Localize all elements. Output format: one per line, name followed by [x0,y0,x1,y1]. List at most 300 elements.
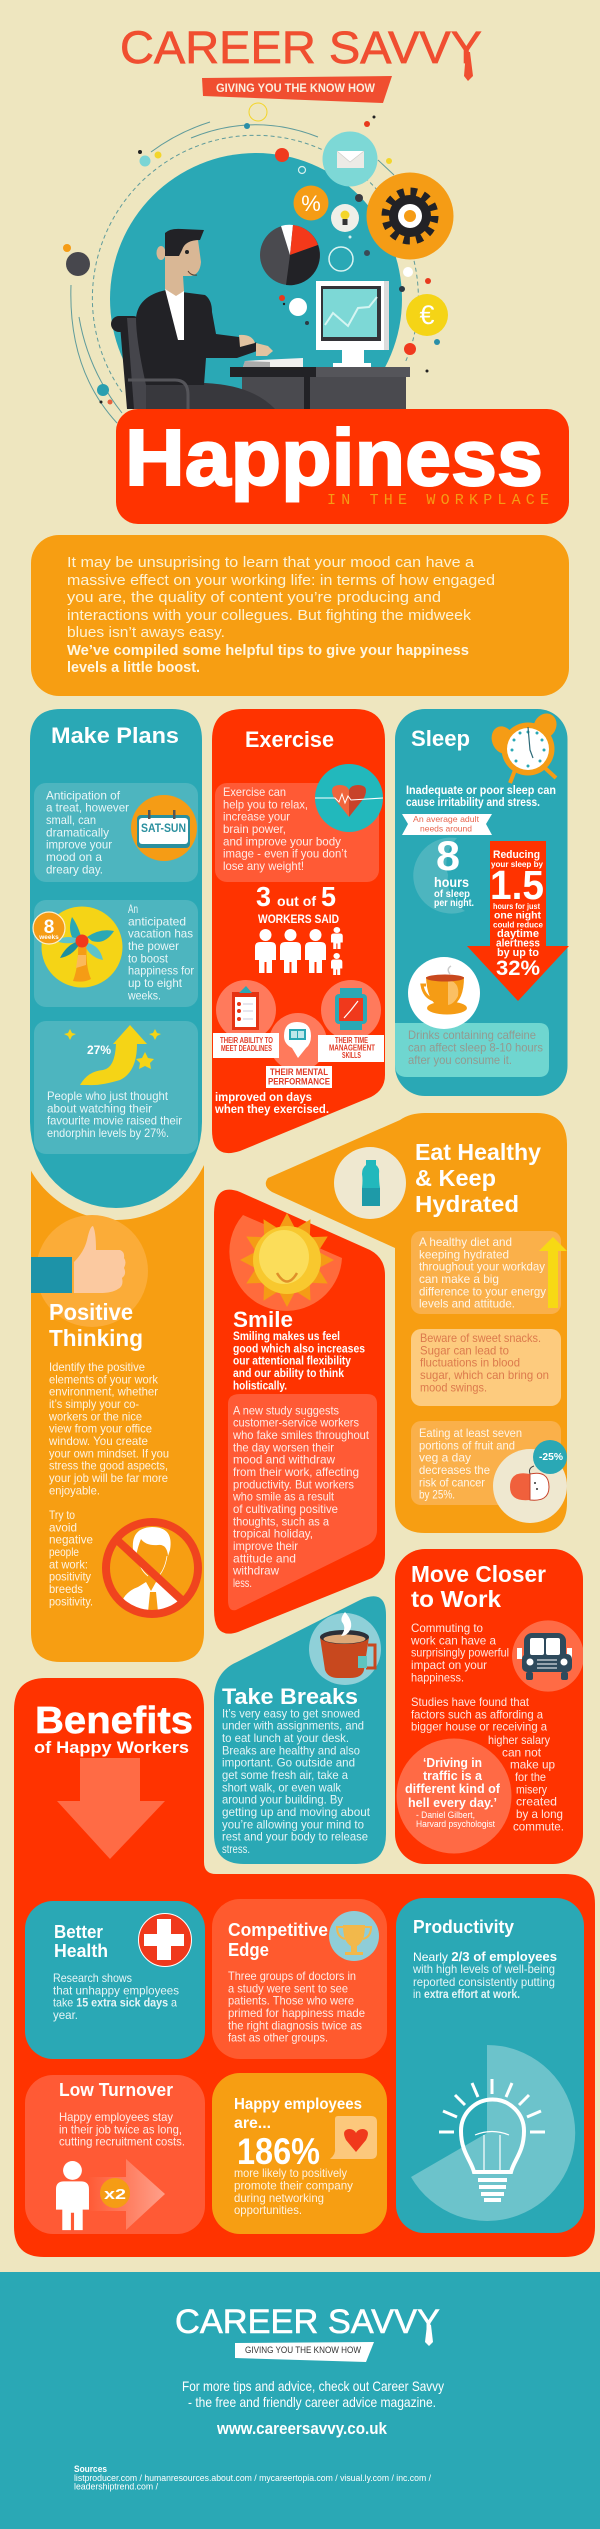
card: productivity: Productivity [413,1917,514,1937]
panel: positive thinking: people [49,1545,79,1559]
footer band [0,2272,600,2529]
text block: anticipation: a treat, however [46,801,129,815]
text block: vacation: An [128,902,138,916]
intro panel [31,535,569,696]
icon: envelope bubble [322,132,378,186]
sources [74,2464,431,2492]
panel: positive thinking: your job will be far more [49,1471,168,1485]
footer tagline ribbon [235,2342,374,2362]
icon: head with book [284,1022,311,1058]
arrow: reducing sleep statistic: one night [494,910,541,922]
icon: gear [366,172,454,260]
text block: anticipation: improve your [46,838,112,852]
text block: customer service study: the day worsen their [233,1440,334,1454]
callout: quote: traffic is a [423,1769,483,1783]
text block: healthy diet: can make a big [419,1272,499,1286]
text block: vacation: happiness for [128,964,194,978]
footer tagline ribbon: GIVING YOU THE KNOW HOW [245,2345,361,2355]
text block: anticipation: dreary day. [46,862,103,876]
card: competitive edge: Competitive [228,1920,328,1940]
text block: healthy diet [411,1231,567,1314]
card: competitive edge: Edge [228,1940,269,1960]
panel: positive thinking: breeds [49,1582,83,1596]
text block: customer service study: attitude and [233,1551,296,1565]
callout: quote: hell every day.’ [408,1796,497,1810]
card: better health: Research shows [53,1971,132,1985]
chart: two thirds pie [411,2045,575,2221]
text block: anticipation: mood on a [46,850,102,864]
tagline ribbon: GIVING YOU THE KNOW HOW [216,83,375,95]
footer logo: CAREER SAVVY [175,2303,440,2341]
text block: smile summary: and our ability to think [233,1366,344,1380]
panel: move closer to work: bigger house or receiving a [411,1720,547,1734]
callout: quote: Harvard psychologist [416,1819,495,1829]
text block: customer service study: mood and withdraw [233,1453,335,1467]
label: time management [318,1035,384,1062]
panel: positive thinking: workers or the nice [48,1409,142,1423]
text block: exercise benefits: help you to relax, [223,797,308,811]
ribbon: average adult: needs around [420,824,472,834]
caffeine note: after you consume it. [408,1053,512,1067]
panel: smile: Smile [233,1307,293,1332]
text block: fruit and veg [411,1421,561,1505]
panel: take breaks: you’re allowing your mind to [222,1817,364,1831]
panel: take breaks: It’s very easy to get snowed [222,1706,360,1720]
card: competitive edge: primed for happiness made [228,2006,365,2020]
card: competitive edge: Three groups of doctors in [228,1969,356,1983]
panel: take breaks: under with assignments, and [222,1719,364,1733]
label: deadlines: MEET DEADLINES [221,1044,272,1053]
card: happy employees 186 percent: opportunities. [234,2203,302,2217]
panel: move closer to work: can not [502,1745,542,1759]
panel: benefits of happy workers background: Benefits [35,1700,193,1742]
text block: movie endorphins: 27% [87,1043,111,1057]
panel: move closer to work: misery [516,1782,547,1796]
panel: move closer to work: impact on your [411,1658,487,1672]
card: low turnover: Low Turnover [59,2080,173,2100]
label: mental performance [266,1066,332,1088]
text block: healthy diet: throughout your workday [419,1260,545,1274]
text block: smile summary [233,1329,365,1392]
caffeine note [395,1023,549,1077]
card: productivity: Nearly 2/3 of employees [413,1949,557,1964]
icon: euro coin: € [419,300,435,330]
sources: leadershiptrend.com / [74,2482,158,2492]
text block: movie endorphins: favourite movie raised their [47,1114,182,1128]
statistic: 8 hours of sleep: 8 [436,832,460,879]
text block: fruit and veg: portions of fruit and [419,1438,515,1452]
icon: smiling sun [229,1213,342,1311]
panel: move closer to work: by a long [516,1807,563,1821]
panel: move closer to work: to Work [411,1586,502,1612]
icon: weekend calendar [131,795,197,861]
label: deadlines: THEIR ABILITY TO [220,1036,273,1045]
man in suit on chair [111,229,275,409]
card: better health: that unhappy employees [53,1983,179,1997]
icon: light bulb bubble [331,204,359,232]
panel: move closer to work: higher salary [488,1733,550,1747]
panel: positive thinking: elements of your work [49,1372,158,1386]
text block: healthy diet: A healthy diet and [419,1235,512,1249]
sources: listproducer.com / humanresources.about.com / mycareertopia.com / visual.ly.com / inc.com / [74,2473,431,2483]
footer call to action: www.careersavvy.co.uk [216,2419,387,2438]
panel: exercise: Exercise [245,727,334,752]
text block: exercise benefits: and improve your body [223,834,341,848]
text block: fruit and veg: by 25%. [419,1488,455,1502]
panel: take breaks: getting up and moving about [222,1805,371,1819]
panel: positive thinking: positivity. [49,1594,93,1608]
panel: sleep: Sleep [411,726,470,751]
arrow: reducing sleep statistic: daytime [497,928,539,940]
callout: quote: different kind of [405,1782,501,1796]
panel: positive thinking: stress the good aspects, [49,1459,168,1473]
text block: exercise benefits: increase your [223,810,290,824]
panel: smile [214,1190,385,1634]
icon: heart speech bubble [330,2116,377,2159]
panel: positive thinking [18,1024,214,1662]
card: happy employees 186 percent [212,2073,387,2234]
text block: anticipation: small, can [46,813,96,827]
panel: move closer to work: Commuting to [411,1621,483,1635]
arrow: reducing sleep statistic: Reducing [493,849,540,861]
icon: percent bubble [294,186,328,220]
card: happy employees 186 percent: 186% [237,2131,320,2172]
panel: move closer to work: factors such as affording a [411,1707,543,1721]
card: productivity [396,1898,584,2233]
card: happy employees 186 percent: during networking [234,2191,324,2205]
icon: euro coin [406,294,448,336]
panel: move closer to work: Studies have found that [411,1695,530,1709]
label: time management: SKILLS [342,1051,361,1060]
statistic: 3 out of 5: 3 [256,881,271,912]
icon: rising arrow with stars [64,1025,161,1085]
panel: benefits of happy workers background: of Happy Workers [34,1738,189,1757]
text block: sweet snacks [411,1329,561,1406]
card: happy employees 186 percent: promote their company [234,2179,353,2193]
text block: smile summary: holistically. [233,1378,287,1392]
panel: benefits of happy workers background [14,1678,595,2257]
title banner: Happiness in the workplace [116,409,569,524]
panel: eat healthy and keep hydrated: Eat Healthy [415,1139,541,1165]
intro panel: massive effect on your working life: in terms of how engaged [67,573,495,589]
sources: Sources [74,2464,107,2474]
panel: move closer to work: work can have a [410,1633,496,1647]
intro panel: interactions with your collegues. But fighting the midweek [67,608,472,624]
footer call to action: For more tips and advice, check out Career Savvy [182,2378,444,2394]
icon: palm tree: weeks [38,934,59,941]
callout: quote [396,1738,512,1854]
text block: healthy diet: difference to your energy [419,1284,546,1298]
text block: fruit and veg: veg a day [419,1451,471,1465]
statistic: 3 out of 5: out of [277,893,316,909]
panel: positive thinking: at work: [49,1557,88,1571]
panel: positive thinking: Positive [49,1299,133,1325]
text block: anticipation [34,783,198,882]
card: productivity: reported consistently putting [413,1975,555,1989]
text block: movie endorphins: People who just thought [47,1089,169,1103]
text block: customer service study: thoughts, such as a [233,1514,329,1528]
panel: take breaks: Breaks are healthy and also [222,1743,360,1757]
icon: palm tree [33,906,122,988]
intro panel: blues isn’t aways easy. [67,625,225,641]
panel: positive thinking: view from your office [49,1422,152,1436]
text block: vacation: up to eight [128,976,183,990]
panel: exercise: when they exercised. [214,1102,329,1116]
intro panel: levels a little boost. [67,660,200,676]
text block: vacation: weeks. [127,988,161,1002]
card: productivity: in extra effort at work. [413,1987,520,2001]
statistic: 8 hours of sleep: of sleep [434,889,470,900]
text block: smile summary: Smiling makes us feel [233,1329,340,1343]
panel: move closer to work: commute. [513,1819,564,1833]
arrow: reducing sleep statistic: could reduce [493,920,543,930]
text block: sweet snacks: Sugar can lead to [420,1343,509,1357]
text block: smile summary: good which also increases [233,1341,365,1355]
icon: person with x2 arrow: x2 [104,2186,126,2203]
text block: fruit and veg: risk of cancer [419,1475,485,1489]
card: happy employees 186 percent: are... [234,2115,271,2132]
panel: eat healthy and keep hydrated: Hydrated [415,1191,519,1217]
card: better health [25,1901,205,2059]
ribbon: average adult [402,814,492,835]
panel: take breaks: short walk, or even walk [222,1780,341,1794]
panel: take breaks: important. Go outside and [222,1756,355,1770]
panel: sleep: Inadequate or poor sleep can [406,783,556,797]
text block: fruit and veg: decreases the [419,1463,490,1477]
text block: sweet snacks: sugar, which can bring on [420,1368,549,1382]
arrow: reducing sleep statistic [467,841,569,1001]
text block: customer service study: withdraw [232,1564,279,1578]
panel: exercise: improved on days [215,1090,312,1104]
intro panel: We’ve compiled some helpful tips to give your happiness [67,643,469,659]
callout: quote: - Daniel Gilbert, [416,1810,475,1820]
panel: positive thinking: environment, whether [49,1385,158,1399]
icon: medical cross [138,1914,192,1966]
panel: take breaks: stress. [222,1842,250,1856]
label: mental performance: THEIR MENTAL [270,1067,328,1077]
text block: healthy diet: levels and attitude. [419,1297,515,1311]
icon: person with x2 arrow [56,2159,165,2230]
panel: move closer to work: for the [515,1770,546,1784]
panel: sleep [395,709,569,1096]
text block: customer service study: tropical holiday, [233,1527,313,1541]
card: productivity: with high levels of well-being [412,1962,555,1976]
icon: percent bubble: % [301,191,321,216]
improvement circles and labels [213,980,384,1088]
footer call to action [182,2378,444,2438]
panel: positive thinking: it’s simply your co- [49,1397,139,1411]
caffeine note: Drinks containing caffeine [408,1028,536,1042]
title banner: Happiness in the workplace: Happiness [125,413,543,502]
arrow: reducing sleep statistic: 1.5 [490,862,544,908]
icon: coffee cup [408,957,480,1029]
icon: water bottle [334,1147,406,1219]
icon: watch [335,988,367,1030]
intro panel: you are, the quality of content you’re producing and [67,590,441,606]
text block: customer service study: A new study suggests [233,1403,339,1417]
statistic: 8 hours of sleep [413,832,474,914]
text block: movie endorphins: about watching their [47,1101,152,1115]
label: deadlines [213,1033,279,1058]
teal backdrop circle [110,153,402,445]
text block: vacation [34,900,198,1007]
icon: apple with minus 25 percent badge: -25% [539,1451,564,1463]
card: better health: take 15 extra sick days a [53,1996,177,2010]
text block: exercise benefits: lose any weight! [223,859,304,873]
text block: sweet snacks: fluctuations in blood [420,1356,520,1370]
text block: customer service study: productivity. But workers [233,1477,354,1491]
panel: positive thinking: Identify the positive [49,1360,145,1374]
text block: exercise benefits: image - even if you don’t [223,847,348,861]
panel: make plans [30,709,202,1208]
icon: cup of tea [309,1612,381,1685]
text block: customer service study: customer-service workers [233,1416,359,1430]
statistic: 3 out of 5: WORKERS SAID [258,912,339,926]
statistic: 3 out of 5 [256,881,339,926]
arrow: reducing sleep statistic: by up to [497,947,539,959]
panel: move closer to work: Move Closer [411,1561,546,1587]
text block: exercise benefits: brain power, [223,822,286,836]
panel: move closer to work: created [516,1795,557,1809]
panel: take breaks: around your building. By [222,1793,343,1807]
text block: anticipation: Anticipation of [46,788,121,802]
title banner: Happiness in the workplace: IN THE WORKPLACE [327,492,549,509]
text block: customer service study: of cultivating positive [233,1502,338,1516]
text block: vacation: vacation has [128,927,193,941]
panel: positive thinking: your own mindset. If you [49,1446,169,1460]
hero illustration: man at a desk with floating icons [63,103,454,445]
footer call to action: - the free and friendly career advice magazine. [188,2394,436,2410]
icon: light bulb [439,2079,545,2200]
card: competitive edge: fast as other groups. [228,2031,328,2045]
tagline ribbon [202,76,392,103]
panel: positive thinking: negative [49,1533,93,1547]
text block: exercise benefits [215,783,379,882]
icon: clipboard [232,986,259,1030]
callout: quote: ‘Driving in [423,1756,482,1770]
text block: smile summary: our attentional flexibility [233,1354,351,1368]
icon: palm tree: 8 [44,917,54,938]
card: competitive edge: patients. Those who were [228,1994,354,2008]
card: happy employees 186 percent: Happy employees [234,2096,362,2113]
text block: customer service study: who smile as a result [232,1490,335,1504]
text block: customer service study: improve their [233,1539,298,1553]
orbit arcs [71,122,418,423]
statistic: 3 out of 5: 5 [321,881,336,912]
desk and keyboard [230,358,410,409]
label: time management: THEIR TIME [335,1036,368,1045]
intro panel: It may be unsuprising to learn that your mood can have a [67,555,475,571]
icon: weekend calendar: SAT-SUN [141,823,186,835]
card: competitive edge: a study were sent to see [228,1981,348,1995]
panel: positive thinking: avoid [49,1520,77,1534]
icon: apple with minus 25 percent badge [493,1440,567,1523]
panel: positive thinking: Thinking [49,1325,143,1351]
arrow: reducing sleep statistic: hours for just [493,902,540,911]
icon: workers pictogram [255,927,343,975]
text block: fruit and veg: Eating at least seven [419,1426,522,1440]
icon: thumbs up [31,1215,148,1327]
icon: trophy [329,1911,379,1961]
card: low turnover: in their job twice as long, [59,2122,182,2136]
text block: sweet snacks: Beware of sweet snacks. [420,1331,541,1345]
text block: movie endorphins [34,1021,198,1154]
pie chart [260,225,320,285]
text block: vacation: to boost [128,951,169,965]
panel: sleep: cause irritability and stress. [406,795,540,809]
card: competitive edge [212,1899,387,2059]
text block: customer service study: who fake smiles throughout [232,1428,370,1442]
caffeine note: can affect sleep 8-10 hours [408,1040,543,1054]
panel: positive thinking: enjoyable. [49,1483,100,1497]
text block: movie endorphins: endorphin levels by 27%. [47,1126,169,1140]
text block: customer service study: from their work, affecting [233,1465,359,1479]
card: low turnover: Happy employees stay [59,2110,173,2124]
arrow: reducing sleep statistic: your sleep by [491,860,544,869]
panel: positive thinking: window. You create [48,1434,148,1448]
arrow: energy up [539,1237,567,1308]
arrow: down to benefits [57,1758,165,1859]
card: happy employees 186 percent: more likely to positively [234,2166,347,2180]
card: low turnover [25,2075,205,2234]
icon: bus [512,1620,583,1692]
panel: positive thinking: positivity [49,1570,91,1584]
panel: eat healthy and keep hydrated: & Keep [415,1165,496,1191]
card: better health: Better [54,1922,103,1942]
decorative dots [63,103,440,404]
statistic: 8 hours of sleep: per night. [434,898,474,909]
arrow: reducing sleep statistic: 32% [496,957,540,980]
icon: no negative people [106,1522,198,1614]
panel: take breaks: Take Breaks [222,1684,358,1709]
statistic: 8 hours of sleep: hours [434,874,469,890]
arrow: reducing sleep statistic: alertness [496,938,540,950]
text block: customer service study: less. [233,1576,252,1590]
panel: move closer to work: happiness. [411,1670,464,1684]
panel: take breaks: get some fresh air, take a [222,1768,348,1782]
text block: vacation: anticipated [128,914,186,928]
monitor with line chart [316,281,389,367]
card: low turnover: cutting recruitment costs. [59,2135,185,2149]
card: competitive edge: the right diagnosis twice as [228,2018,362,2032]
panel: positive thinking: Try to [49,1508,75,1522]
text block: healthy diet: keeping hydrated [419,1247,509,1261]
icon: alarm clock [488,709,561,783]
panel: make plans: Make Plans [51,723,179,748]
panel: eat healthy and keep hydrated [266,1113,567,1533]
label: time management: MANAGEMENT [329,1044,375,1052]
panel: exercise [212,709,385,1153]
ribbon: average adult: An average adult [413,814,480,824]
panel: move closer to work: make up [510,1758,555,1772]
panel: take breaks [214,1596,386,1864]
panel: move closer to work: surprisingly powerful [411,1646,509,1660]
label: mental performance: PERFORMANCE [268,1076,330,1086]
text block: anticipation: dramatically [46,825,109,839]
panel: move closer to work [395,1549,583,1864]
panel: take breaks: rest and your body to release [222,1830,368,1844]
card: better health: Health [54,1941,108,1961]
panel: take breaks: to eat lunch at your desk. [222,1731,349,1745]
text block: customer service study [228,1394,377,1610]
logo: Career Savvy: CAREER SAVVY [120,22,482,73]
cut-out ring around make plans [18,1024,214,1220]
text block: vacation: the power [128,939,179,953]
text block: sweet snacks: mood swings. [420,1380,487,1394]
card: better health: year. [53,2008,78,2022]
icon: heart with pulse [315,764,383,832]
text block: exercise benefits: Exercise can [223,785,286,799]
